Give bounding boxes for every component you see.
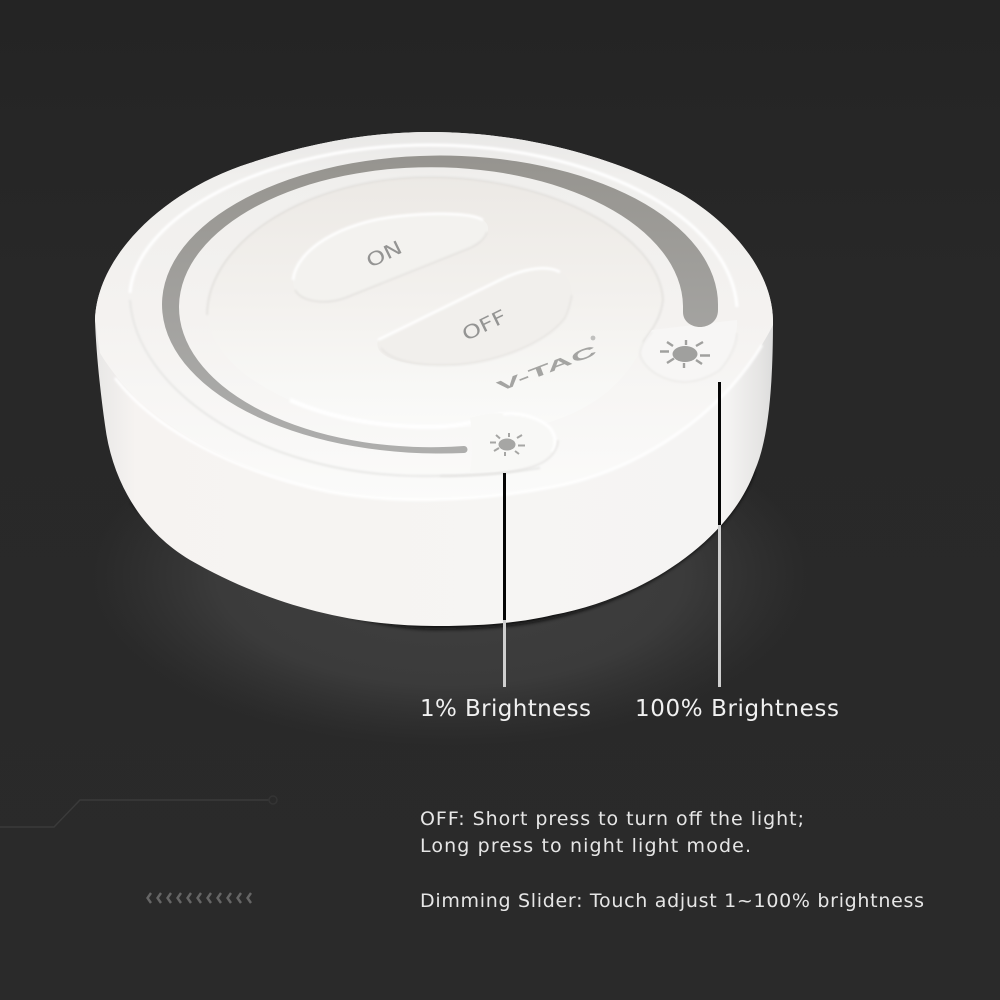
leader line: 100% brightness — [718, 382, 721, 687]
ON button shadow — [295, 232, 487, 302]
device contact shadow — [131, 450, 755, 629]
device body side — [95, 132, 773, 626]
disc top edge shadow — [207, 177, 663, 342]
V-TAC logo — [494, 336, 599, 395]
OFF button — [377, 268, 572, 365]
100% pad edge — [640, 332, 737, 382]
1% pad edge highlight — [503, 414, 555, 452]
decorative chevrons — [148, 893, 251, 903]
disc lower highlight — [290, 400, 503, 427]
OFF button shadow — [381, 295, 572, 365]
glow under device — [90, 405, 810, 745]
description text — [420, 808, 924, 912]
1% brightness pad — [470, 413, 556, 472]
inner disc — [207, 177, 663, 427]
dimming slider arc — [162, 156, 718, 454]
outer ridge ring — [130, 145, 737, 476]
1% pad edge shadow — [440, 440, 558, 476]
label: 100% brightness: 100% Brightness — [635, 696, 839, 722]
decorative circuit line — [0, 796, 277, 827]
registered mark — [591, 336, 595, 340]
label: 1% brightness: 1% Brightness — [420, 696, 591, 722]
ON button — [293, 214, 488, 302]
ON button highlight — [293, 214, 483, 280]
device top face — [95, 132, 773, 500]
icon: sun small — [490, 433, 525, 456]
dimming slider instructions: Dimming Slider: Touch adjust 1~100% brightness — [420, 890, 924, 912]
100% brightness pad — [641, 320, 737, 382]
ON label: ON — [363, 237, 406, 273]
OFF instructions line 2: Long press to night light mode. — [420, 835, 751, 857]
OFF instructions line 1: OFF: Short press to turn off the light; — [420, 808, 804, 830]
V-TAC logo: V-TAC — [494, 342, 599, 395]
OFF button highlight — [378, 268, 560, 340]
leader line: 1% brightness — [503, 473, 506, 687]
icon: sun large — [660, 340, 710, 368]
seam highlight — [115, 345, 762, 500]
device: round touch dimmer — [95, 132, 773, 629]
OFF label: OFF — [459, 306, 510, 346]
